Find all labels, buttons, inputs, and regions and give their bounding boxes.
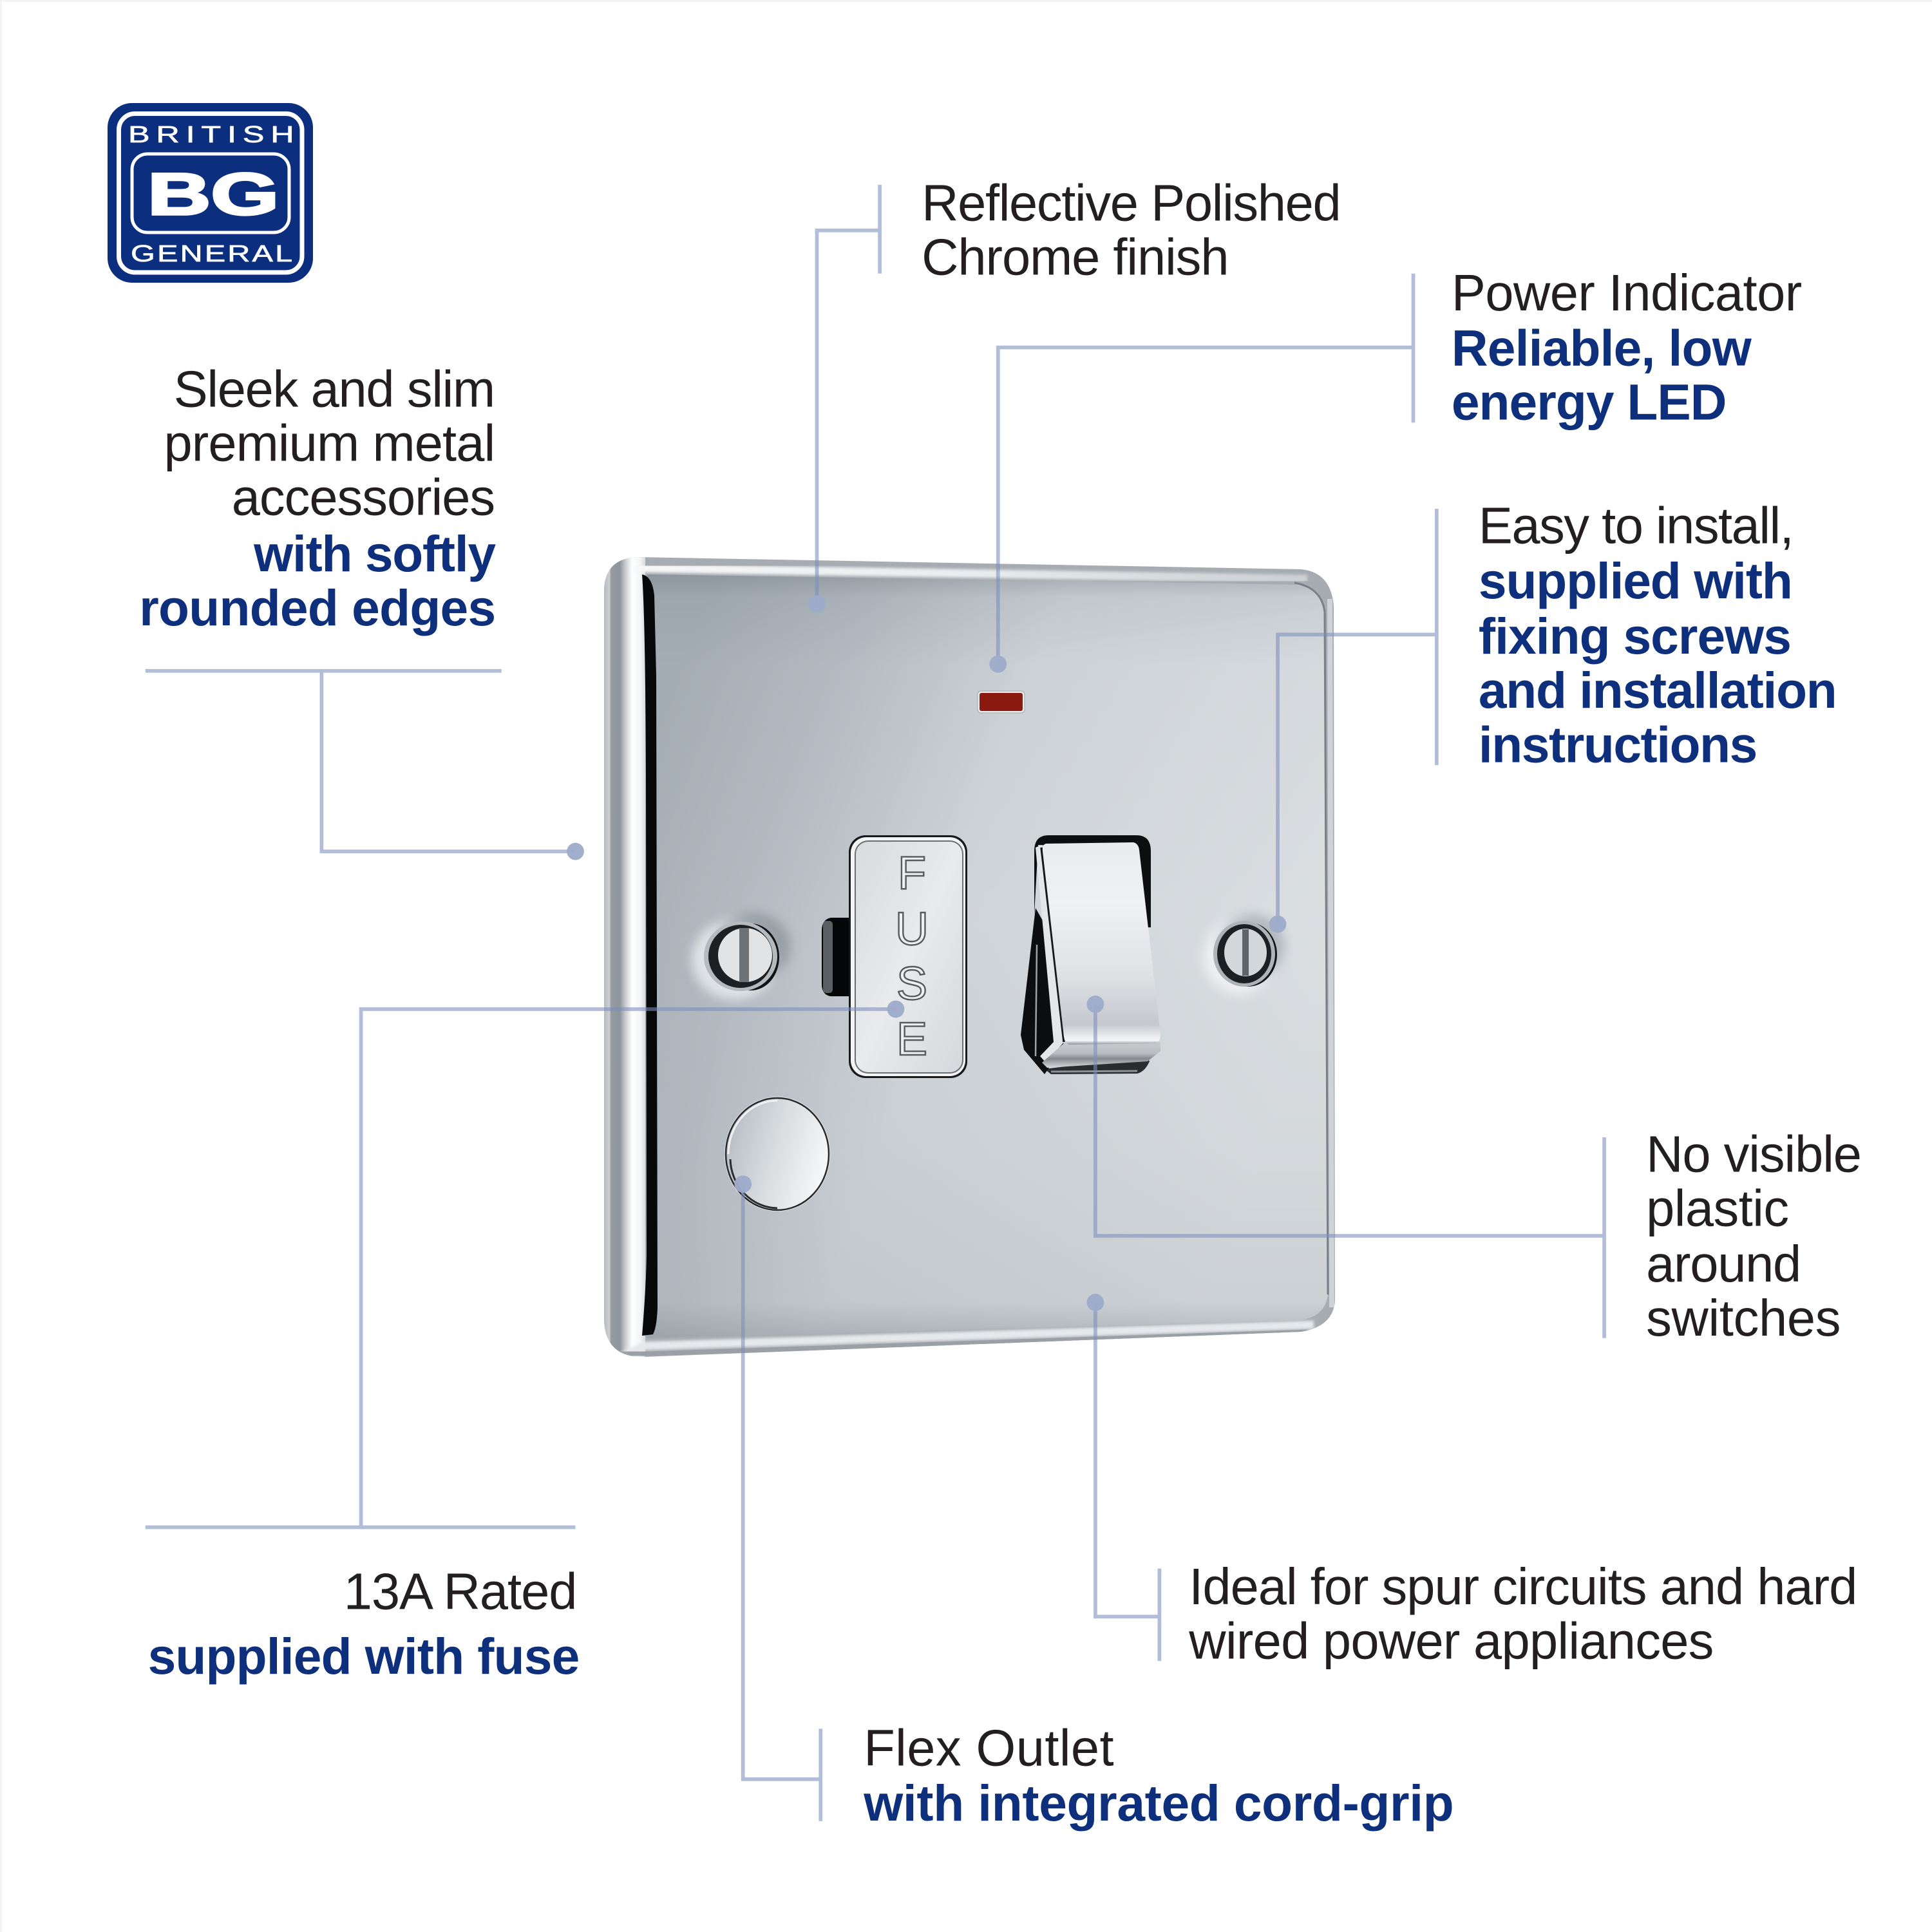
text: flex outlet bbox=[863, 1719, 1454, 1832]
text: easy to install bbox=[1479, 497, 1837, 773]
text: chrome finish: Reflective Polished bbox=[922, 174, 1341, 231]
fuse tab bbox=[822, 918, 851, 996]
connector: spur circuits bbox=[1087, 1294, 1159, 1661]
text: power indicator: energy LED bbox=[1452, 374, 1727, 430]
text: spur circuits bbox=[1188, 1558, 1857, 1669]
connector: flex outlet bbox=[734, 1175, 820, 1821]
plate body and rim bbox=[599, 554, 1340, 1365]
text: flex outlet: with integrated cord-grip bbox=[863, 1775, 1454, 1832]
rocker switch bbox=[1021, 835, 1160, 1074]
text: chrome finish bbox=[922, 174, 1341, 286]
logo: British General: BRITISH bbox=[128, 122, 294, 147]
text: spur circuits: Ideal for spur circuits and hard bbox=[1189, 1558, 1857, 1615]
text: 13A rated: supplied with fuse bbox=[148, 1628, 580, 1685]
logo: British General: BG bbox=[147, 161, 279, 227]
plate face bbox=[644, 570, 1333, 1343]
text: sleek and slim: with softly bbox=[253, 526, 496, 582]
logo: British General bbox=[108, 103, 313, 283]
flex outlet bbox=[724, 1097, 830, 1211]
text: no visible plastic bbox=[1646, 1126, 1862, 1347]
text: sleek and slim: accessories bbox=[232, 469, 495, 526]
recess shadow bbox=[1034, 835, 1151, 927]
text: no visible plastic: No visible bbox=[1646, 1126, 1862, 1183]
fuse lettering: E bbox=[896, 1014, 927, 1065]
text: easy to install: and installation bbox=[1479, 662, 1837, 719]
text: easy to install: supplied with bbox=[1479, 553, 1793, 609]
text: power indicator bbox=[1452, 264, 1802, 430]
fuse lettering: F bbox=[898, 848, 926, 899]
connector: chrome finish bbox=[808, 185, 880, 612]
connector: sleek and slim bbox=[146, 671, 584, 860]
dark side wedge bbox=[1021, 908, 1064, 1074]
callout: flex outlet bbox=[734, 1175, 1454, 1832]
connector: power indicator bbox=[989, 274, 1414, 673]
fuse lettering: S bbox=[896, 958, 927, 1010]
right fixing screw bbox=[1203, 914, 1284, 994]
rocker lip bbox=[1042, 1042, 1160, 1068]
text: easy to install: fixing screws bbox=[1479, 608, 1792, 665]
callout: 13A rated bbox=[146, 1001, 904, 1685]
logo: British General: GENERAL bbox=[131, 241, 292, 267]
text: chrome finish: Chrome finish bbox=[922, 229, 1229, 286]
left rim dark reflection bbox=[642, 574, 658, 1336]
text: easy to install: Easy to install, bbox=[1479, 497, 1794, 554]
text: 13A rated: 13A Rated bbox=[344, 1563, 577, 1620]
chrome side strip bbox=[1036, 845, 1065, 1063]
rocker bottom shadow bbox=[1045, 1056, 1150, 1074]
connector: easy to install bbox=[1269, 509, 1437, 933]
connector: no visible plastic bbox=[1087, 996, 1604, 1338]
switch plate photo bbox=[599, 554, 1340, 1365]
text: flex outlet: Flex Outlet bbox=[864, 1719, 1114, 1777]
rocker face bbox=[1043, 842, 1160, 1045]
text: sleek and slim: Sleek and slim bbox=[174, 360, 495, 417]
text: sleek and slim: rounded edges bbox=[139, 580, 496, 636]
text: no visible plastic: switches bbox=[1646, 1289, 1841, 1347]
text: power indicator: Power Indicator bbox=[1452, 264, 1802, 321]
text: 13A rated bbox=[148, 1563, 580, 1685]
text: power indicator: Reliable, low bbox=[1452, 319, 1752, 376]
text: spur circuits: wired power appliances bbox=[1188, 1612, 1714, 1669]
text: sleek and slim: premium metal bbox=[164, 415, 495, 472]
fuse lettering: U bbox=[895, 904, 929, 955]
callout: no visible plastic bbox=[1087, 996, 1862, 1347]
fuse lettering bbox=[895, 848, 929, 1065]
callout: ideal for spur circuits bbox=[1087, 1294, 1857, 1669]
LED indicator bbox=[978, 691, 1025, 713]
text: easy to install: instructions bbox=[1479, 716, 1757, 773]
fuse holder bbox=[822, 835, 967, 1078]
callout: easy to install bbox=[1269, 497, 1837, 933]
callout: reflective polished chrome finish bbox=[808, 174, 1341, 612]
text: no visible plastic: around bbox=[1646, 1235, 1801, 1293]
text: no visible plastic: plastic bbox=[1646, 1180, 1789, 1237]
connector: 13A rated bbox=[146, 1001, 904, 1527]
text: sleek and slim bbox=[139, 360, 496, 636]
callout: sleek and slim bbox=[139, 360, 584, 860]
callout: power indicator bbox=[989, 264, 1802, 673]
left fixing screw bbox=[692, 913, 791, 999]
